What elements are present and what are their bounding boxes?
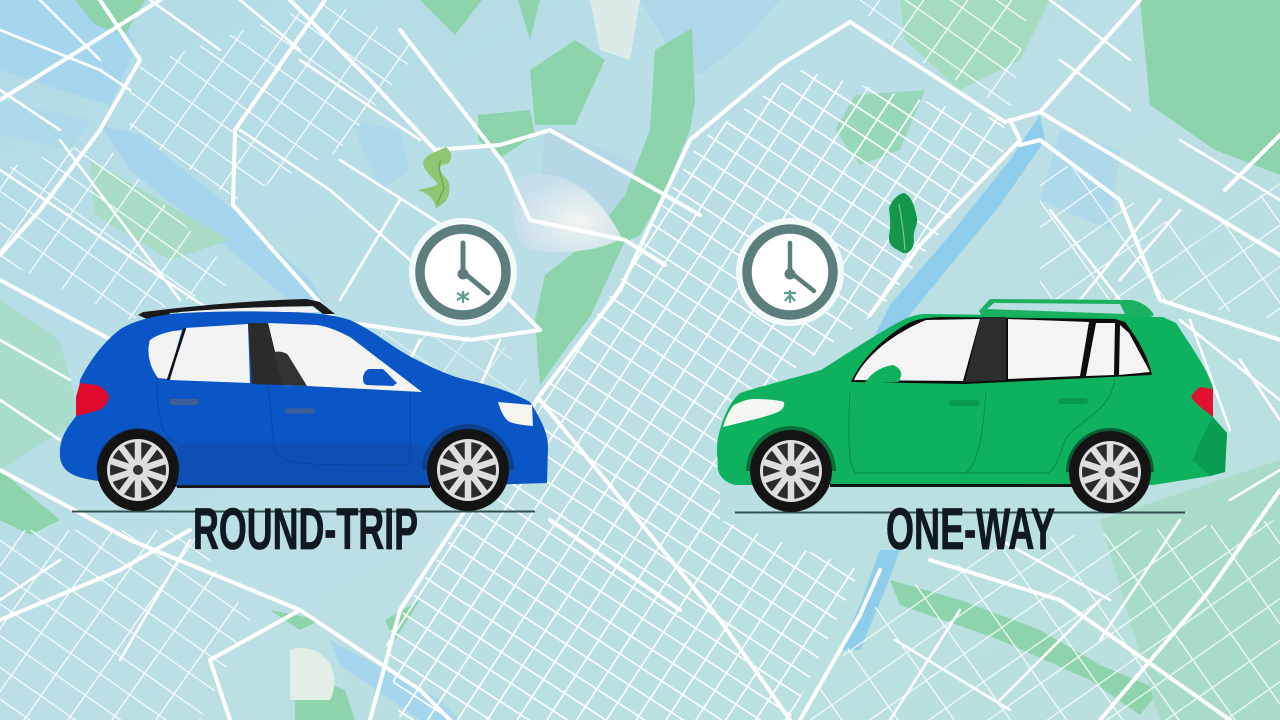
tail light [1191,387,1213,417]
door handles [172,399,196,405]
side mirror [865,365,901,383]
rear arch [96,428,180,470]
green one-way car [717,299,1227,513]
headlight [498,402,533,426]
front arch [746,426,836,471]
lower body shade [177,443,427,487]
icon: dark green leaf [889,193,917,253]
front window [268,323,422,392]
underbody [177,485,430,488]
pillar [248,323,283,385]
door seams [157,378,410,465]
side mirror [363,369,397,386]
pillar [965,317,1006,382]
headlight [723,399,784,427]
label: one-way: ONE-WAY [886,497,1055,562]
icon: green dollar leaf [418,147,451,208]
rear window [148,330,182,379]
tail light [76,383,109,416]
door seams [849,378,1115,473]
pale map area [512,174,622,252]
door handles [952,400,977,406]
front arch [422,424,514,470]
blue round-trip car [60,299,548,511]
seat [273,352,307,386]
front window [854,319,980,381]
car body [60,311,548,487]
rear door window [170,324,250,383]
rear wheel [1069,431,1151,513]
front wheel [427,429,509,511]
window frame [851,317,1152,384]
label: round-trip: ROUND-TRIP [193,497,418,562]
front wheel [750,430,832,512]
rear window [1119,325,1150,375]
rear arch [1066,428,1154,472]
rear door window [1086,323,1115,376]
icon: right clock [736,218,844,326]
roof rail [979,299,1154,322]
car body [717,314,1227,485]
rear wheel [97,429,179,511]
rear bumper [1193,418,1227,476]
middle window [1008,319,1089,379]
icon: left clock [409,218,517,326]
ground line: one-way [735,512,1185,514]
roof rack [138,299,335,319]
ground line: round-trip [72,510,535,512]
underbody [830,484,1075,487]
